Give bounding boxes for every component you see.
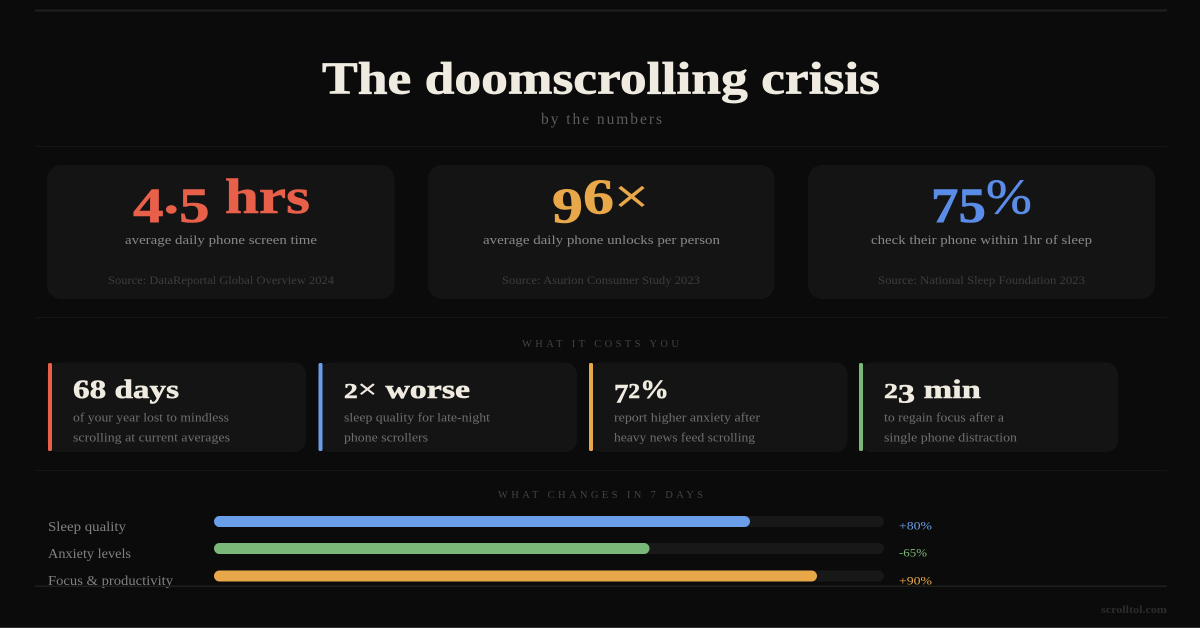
panel: 68 days: scrolling at current averages bbox=[73, 430, 230, 444]
cost figure: 7 bbox=[614, 380, 629, 408]
cost description: of your year lost to mindless bbox=[73, 410, 229, 424]
stat label: check their phone within 1hr of sleep bbox=[871, 232, 1092, 247]
cost figure: 2× worse bbox=[344, 375, 470, 404]
stat source: Source: Asurion Consumer Study 2023 bbox=[502, 275, 700, 287]
stat source: Source: DataReportal Global Overview 2024 bbox=[108, 275, 334, 287]
stat value: 4.5 hrs: . bbox=[164, 169, 179, 225]
cost figure: min bbox=[915, 375, 981, 404]
panel: sleep check stat bbox=[808, 165, 1155, 299]
row: sleep quality: Sleep quality bbox=[48, 519, 126, 534]
cost description: sleep quality for late-night bbox=[344, 410, 491, 424]
stat source: Source: National Sleep Foundation 2023 bbox=[878, 275, 1085, 287]
stat value: 4.5 hrs: 4 bbox=[133, 178, 164, 234]
cost description: to regain focus after a bbox=[884, 410, 1004, 424]
row: anxiety levels bbox=[48, 543, 927, 561]
panel: 2x worse bbox=[318, 362, 577, 452]
stat label: average daily phone unlocks per person bbox=[483, 232, 721, 247]
cost figure: 2 bbox=[884, 380, 898, 403]
section heading: what it costs you: WHAT IT COSTS YOU bbox=[522, 339, 679, 350]
cost figure: 68 days bbox=[73, 375, 179, 404]
stat value: 75%: % bbox=[986, 169, 1032, 224]
stat value: 96x: 9 bbox=[552, 178, 583, 234]
cost figure: % bbox=[640, 375, 669, 404]
row: anxiety levels: Anxiety levels bbox=[48, 546, 131, 561]
panel: 23 min bbox=[859, 362, 1118, 452]
section heading: what changes in 7 days: WHAT CHANGES IN 7 DAYS bbox=[498, 490, 703, 501]
panel: 68 days bbox=[47, 362, 306, 452]
cost figure: 3 bbox=[898, 379, 915, 408]
title: The doomscrolling crisis bbox=[322, 52, 880, 104]
row: sleep quality: +80% bbox=[899, 518, 932, 532]
row: focus and productivity: +90% bbox=[899, 574, 932, 588]
panel: 23 min: single phone distraction bbox=[884, 430, 1018, 444]
stat value: 4.5 hrs: 5 bbox=[179, 178, 210, 234]
panel: 72% bbox=[589, 362, 848, 452]
row: anxiety levels: -65% bbox=[899, 546, 927, 560]
footer credit: scrolltol.com bbox=[1101, 604, 1167, 616]
stat value: 96x: 6 bbox=[583, 169, 614, 225]
stat value: 75%: 75 bbox=[931, 178, 986, 233]
panel: phone unlocks stat bbox=[428, 165, 774, 299]
panel: 72%: heavy news feed scrolling bbox=[614, 430, 756, 444]
row: focus and productivity bbox=[48, 570, 932, 588]
panel: 2x worse: phone scrollers bbox=[344, 430, 428, 444]
panel: screen time stat bbox=[47, 165, 394, 299]
subtitle: by the numbers bbox=[541, 111, 662, 128]
stat label: average daily phone screen time bbox=[125, 232, 317, 247]
stat value: 96x: × bbox=[614, 169, 649, 225]
cost description: report higher anxiety after bbox=[614, 410, 761, 424]
row: focus and productivity: Focus & productivity bbox=[48, 573, 173, 588]
stat value: 4.5 hrs: hrs bbox=[210, 169, 310, 225]
cost figure: 2 bbox=[628, 379, 640, 403]
row: sleep quality bbox=[48, 516, 932, 534]
bar chart: 7-day changes bbox=[48, 516, 932, 588]
